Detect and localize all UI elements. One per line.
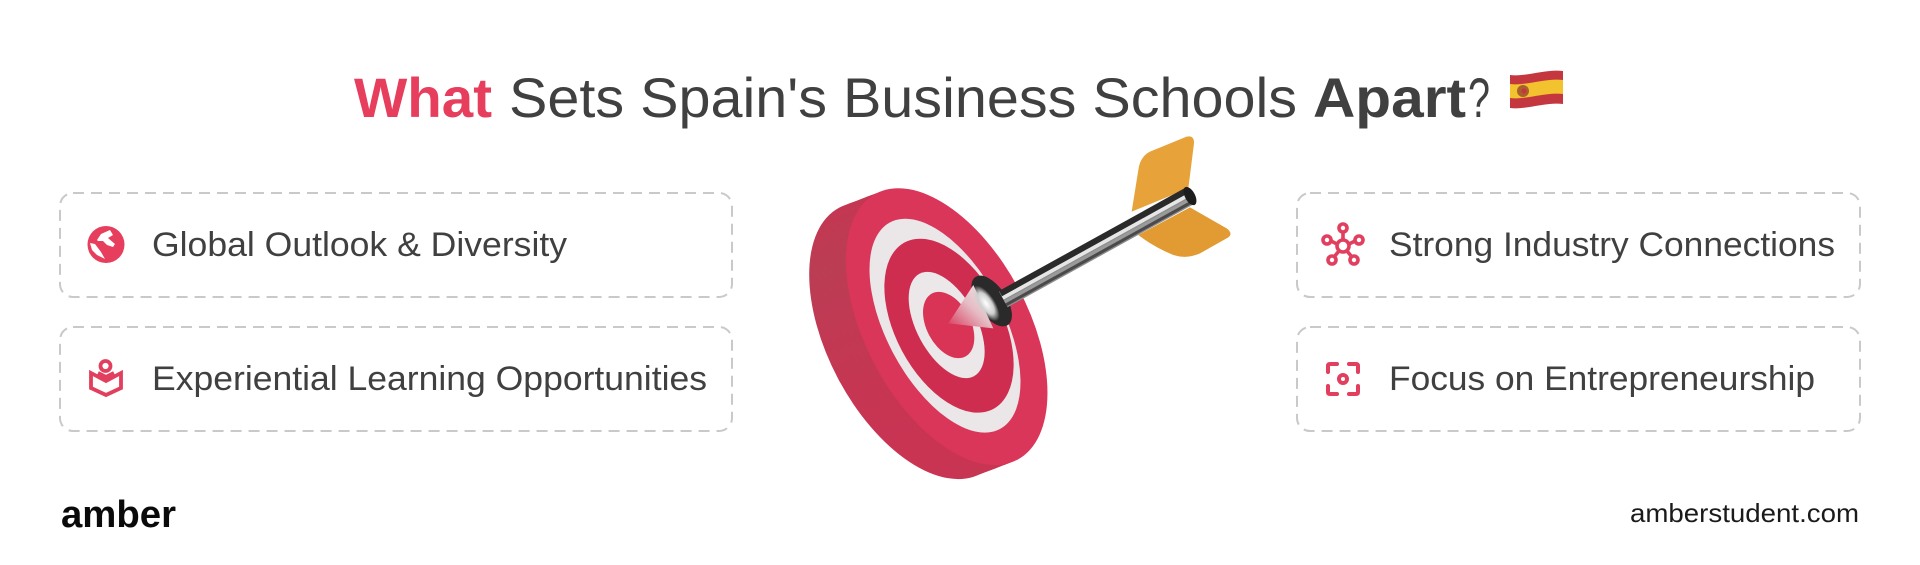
- target face: [804, 155, 1089, 498]
- panel: Strong Industry Connections: [1297, 193, 1860, 297]
- title: Apart: [1313, 66, 1466, 129]
- dart shaft: [1001, 185, 1199, 305]
- title: Sets Spain's Business Schools: [509, 66, 1297, 129]
- logo: amber: amber: [61, 494, 176, 536]
- website: amberstudent.com: [1630, 498, 1859, 528]
- illustration: dart hitting target: [767, 136, 1230, 512]
- label: Global Outlook & Diversity: [152, 226, 567, 264]
- title: [354, 66, 1490, 129]
- icon: Spanish flag: [1510, 71, 1563, 108]
- icon: globe: [88, 226, 124, 263]
- icon: focus frame: [1328, 364, 1358, 394]
- title: ?: [1468, 66, 1490, 129]
- panel: Focus on Entrepreneurship: [1297, 327, 1860, 431]
- label: Strong Industry Connections: [1389, 226, 1835, 264]
- dart collar and tip: [948, 269, 1020, 333]
- target side wall: [767, 158, 1083, 512]
- label: Focus on Entrepreneurship: [1389, 360, 1815, 398]
- icon: network nodes: [1323, 224, 1363, 264]
- icon: reader with open book: [91, 361, 121, 395]
- title: What: [354, 66, 492, 129]
- label: Experiential Learning Opportunities: [152, 360, 707, 398]
- panel: Global Outlook and Diversity: [60, 193, 732, 297]
- dart fletching: [1132, 136, 1230, 257]
- panel: Experiential Learning Opportunities: [60, 327, 732, 431]
